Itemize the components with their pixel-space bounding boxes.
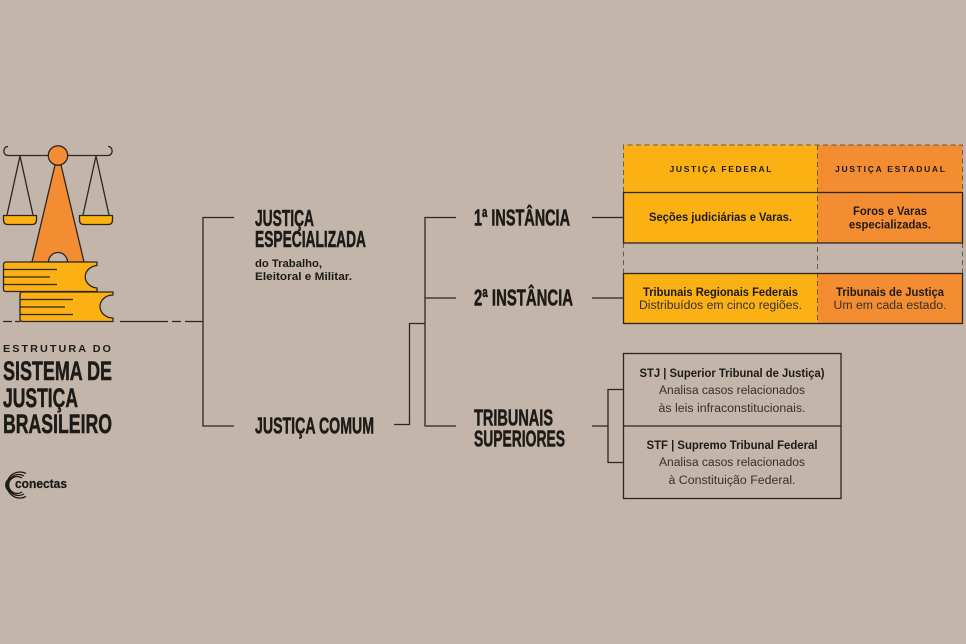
text: STJ: STJ | Superior Tribunal de Justiça) — [640, 368, 825, 380]
icon: scales of justice on books — [4, 146, 113, 322]
logo: conectas: conectas — [15, 476, 67, 491]
title — [3, 343, 113, 439]
heading: Tribunais Superiores: TRIBUNAIS — [474, 404, 553, 430]
row: second instance — [624, 274, 962, 324]
row: second instance: Tribunais Regionais Federais — [643, 287, 798, 299]
dashed table guides — [624, 145, 962, 323]
heading: Tribunais Superiores — [474, 404, 565, 452]
heading: 2ª Instância: 2ª INSTÂNCIA — [474, 284, 573, 310]
row: second instance: Um em cada estado. — [834, 300, 946, 312]
heading: Justiça Especializada: Eleitoral e Militar. — [255, 271, 352, 283]
row: second instance: Tribunais de Justiça — [836, 287, 945, 299]
text: STF: à Constituição Federal. — [668, 475, 796, 487]
heading: Justiça Especializada — [255, 205, 366, 283]
row: first instance — [624, 192, 962, 243]
row: first instance: Seções judiciárias e Varas. — [649, 212, 792, 224]
column header: Justiça Estadual — [818, 145, 962, 192]
logo: conectas — [6, 472, 67, 498]
text: STJ: às leis infraconstitucionais. — [658, 403, 806, 415]
text: STF — [646, 440, 818, 487]
heading: Justiça Especializada: ESPECIALIZADA — [255, 226, 366, 252]
row: first instance: Foros e Varas — [853, 206, 927, 218]
heading: Justiça Especializada: do Trabalho, — [255, 258, 322, 270]
column header: Justiça Estadual: JUSTIÇA ESTADUAL — [835, 164, 945, 174]
column header: Justiça Federal: JUSTIÇA FEDERAL — [670, 164, 772, 174]
title: JUSTIÇA — [3, 383, 78, 413]
connector: second branch to instances — [394, 218, 623, 462]
panel: court table — [624, 145, 962, 324]
column header: Justiça Federal — [624, 145, 818, 192]
title: ESTRUTURA DO — [3, 343, 113, 355]
text: STF: STF | Supremo Tribunal Federal — [646, 440, 818, 452]
title: BRASILEIRO — [3, 409, 112, 439]
text: STF: Analisa casos relacionados — [659, 457, 805, 469]
connector: dashed baseline to first branch — [3, 218, 234, 426]
row: second instance: Distribuídos em cinco regiões. — [639, 300, 802, 312]
row: first instance: especializadas. — [849, 220, 931, 232]
panel: superior courts — [624, 354, 841, 498]
text: STJ — [640, 368, 825, 415]
heading: Justiça Especializada: JUSTIÇA — [255, 205, 314, 231]
text: STJ: Analisa casos relacionados — [659, 385, 805, 397]
heading: Tribunais Superiores: SUPERIORES — [474, 426, 565, 452]
title: SISTEMA DE — [3, 356, 112, 386]
heading: 1ª Instância: 1ª INSTÂNCIA — [474, 204, 570, 230]
heading: Justiça Comum: JUSTIÇA COMUM — [255, 412, 374, 438]
